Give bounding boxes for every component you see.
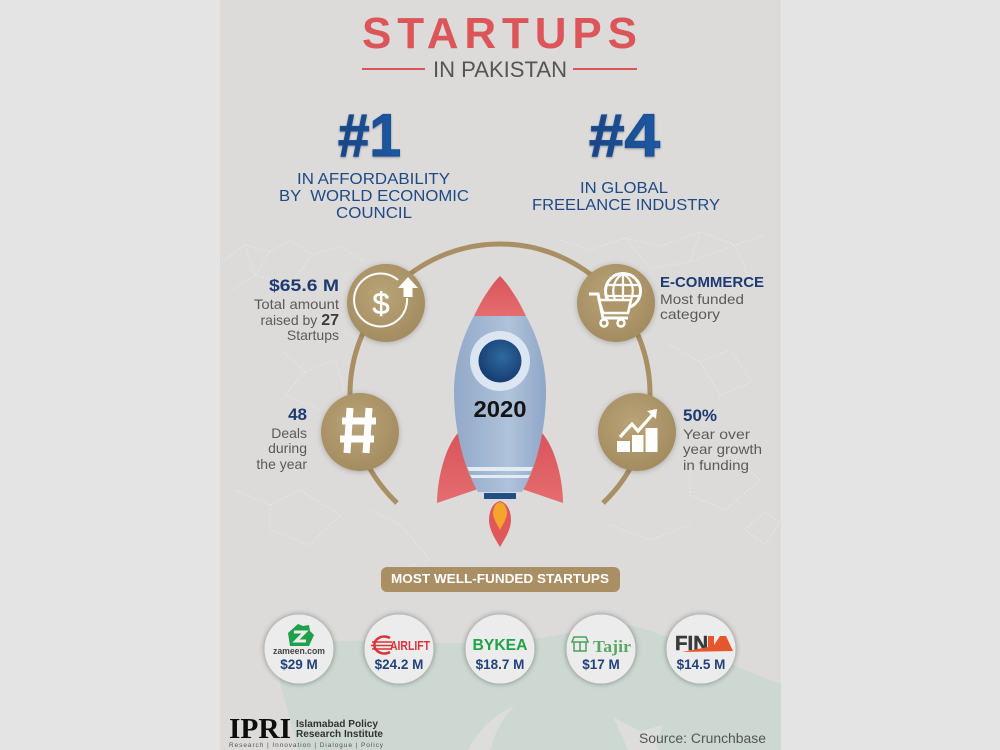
startup: finja bbox=[666, 614, 736, 684]
subtitle: IN PAKISTAN bbox=[433, 57, 567, 82]
text: yearly growth: year growth bbox=[683, 441, 762, 457]
text: total raised bbox=[254, 276, 339, 343]
startup: tajir bbox=[566, 614, 636, 684]
stat: #4 freelance: FREELANCE INDUSTRY bbox=[532, 197, 720, 214]
stat: #1 affordability: COUNCIL bbox=[336, 205, 412, 222]
text: e-commerce: Most funded bbox=[660, 291, 744, 307]
startup: finja: $14.5 M bbox=[677, 657, 725, 672]
logo: IPRI: Islamabad Policy bbox=[296, 718, 378, 730]
startup: zameen bbox=[264, 614, 334, 684]
background: network map bbox=[222, 232, 780, 570]
logo: IPRI: Research Institute bbox=[296, 728, 383, 740]
stat: #1 affordability: #1 bbox=[338, 102, 401, 169]
heading: most well-funded startups bbox=[381, 567, 620, 592]
text: deals: Deals bbox=[271, 425, 307, 441]
text: deals bbox=[256, 405, 307, 472]
text: e-commerce: E-COMMERCE bbox=[660, 274, 764, 291]
icon: dollar with arrow: $ bbox=[372, 286, 390, 321]
ring arc bbox=[350, 244, 650, 503]
stat: #4 freelance: #4 bbox=[589, 102, 661, 169]
stat: #1 affordability: IN AFFORDABILITY bbox=[297, 171, 450, 188]
heading: most well-funded startups: MOST WELL-FUNDED STARTUPS bbox=[391, 572, 609, 586]
text: yearly growth: in funding bbox=[683, 457, 749, 473]
text: total raised: Total amount bbox=[254, 296, 339, 312]
text: total raised: Startups bbox=[287, 327, 339, 343]
startup: airlift: AIRLIFT bbox=[390, 639, 430, 653]
startup: zameen: zameen.com bbox=[273, 646, 325, 657]
logo: IPRI: IPRI bbox=[229, 714, 291, 745]
text: deals: 48 bbox=[288, 405, 307, 424]
background: pakistan flag bbox=[270, 625, 781, 750]
text: yearly growth: 50% bbox=[683, 406, 717, 425]
text: e-commerce bbox=[660, 274, 764, 322]
stat: #1 affordability: BY WORLD ECONOMIC bbox=[279, 188, 469, 205]
stat: #1 affordability bbox=[279, 102, 469, 222]
startup: tajir: Tajir bbox=[593, 637, 631, 656]
title: STARTUPS bbox=[362, 9, 637, 58]
text: deals: during bbox=[268, 440, 307, 456]
text: total raised: raised by 27 bbox=[260, 312, 339, 329]
icon: dollar with arrow bbox=[347, 264, 425, 342]
logo: IPRI bbox=[229, 714, 384, 749]
icon: growth chart bbox=[598, 393, 676, 471]
startup: bykea: $18.7 M bbox=[476, 657, 524, 672]
text: yearly growth bbox=[683, 406, 762, 473]
panel: background bbox=[220, 0, 781, 750]
text: deals: the year bbox=[256, 456, 307, 472]
startup: airlift: $24.2 M bbox=[375, 657, 423, 672]
startup: zameen: $29 M bbox=[280, 657, 318, 672]
rocket bbox=[437, 276, 563, 547]
icon: hash bbox=[321, 393, 399, 471]
startup: tajir: $17 M bbox=[582, 657, 620, 672]
startup: bykea bbox=[466, 614, 534, 684]
startup: bykea: BYKEA bbox=[472, 637, 528, 654]
logo: IPRI: Research | Innovation | Dialogue | Policy bbox=[229, 742, 384, 749]
rocket: 2020 bbox=[474, 396, 526, 422]
text: yearly growth: Year over bbox=[683, 426, 750, 442]
icon: globe shopping cart bbox=[577, 264, 655, 342]
source note: Source: Crunchbase bbox=[639, 731, 766, 746]
stat: #4 freelance bbox=[532, 102, 720, 214]
startup: finja: FIN bbox=[675, 633, 708, 655]
text: e-commerce: category bbox=[660, 306, 720, 322]
text: total raised: $65.6 M bbox=[269, 276, 339, 295]
stat: #4 freelance: IN GLOBAL bbox=[580, 180, 668, 197]
startup: airlift bbox=[364, 614, 434, 684]
